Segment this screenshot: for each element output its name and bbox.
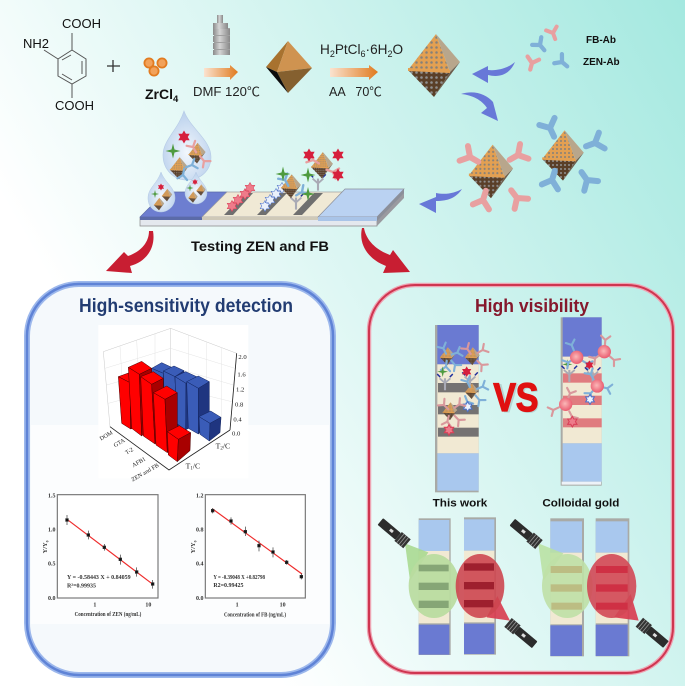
3D bar chart: 1.6 <box>237 371 246 378</box>
line chart: FB calibration: 0.8 <box>196 527 203 533</box>
capture complexes on strip <box>276 148 344 210</box>
label: AA 70C: AA 70℃ <box>329 85 382 99</box>
red bars <box>118 361 191 462</box>
3D bar chart: 0.8 <box>235 402 244 409</box>
3D bar chart: 2.0 <box>238 354 247 361</box>
3D bar chart: /C <box>193 461 200 470</box>
line chart: ZEN calibration: Y = -0.58443 X + 0.84059 <box>67 575 131 581</box>
chemical structure: aminoterephthalic acid: COOH <box>62 16 101 31</box>
comparison strips <box>435 317 620 492</box>
label: H2PtCl6 6H2O: 6 <box>361 49 366 59</box>
arrow: orange DMF step <box>204 65 238 80</box>
3D bar chart: 2 <box>220 447 223 452</box>
chemical structure: aminoterephthalic acid <box>23 16 101 113</box>
line chart: FB calibration: 0.0 <box>196 596 203 602</box>
panel: high visibility <box>369 285 673 673</box>
label: H2PtCl6 6H2O: PtCl <box>335 42 361 57</box>
line chart: ZEN calibration: 1.5 <box>48 493 55 499</box>
line chart: ZEN calibration <box>42 493 158 618</box>
3D bar chart: /C <box>223 441 230 450</box>
3D bar chart: AFB1 <box>131 457 147 469</box>
3D bar chart: 0.0 <box>232 430 241 437</box>
line chart: ZEN calibration: 1.0 <box>48 527 55 533</box>
line chart: FB calibration: R2=0.99425 <box>213 583 244 589</box>
label: ZrCl4: ZrCl <box>145 86 173 102</box>
line chart: FB calibration: Concentration of FB (ng/mL) <box>224 612 286 619</box>
3D bar chart: 0.4 <box>233 417 242 424</box>
strip: colloidal gold <box>548 317 620 486</box>
arrow: red left <box>106 231 154 273</box>
blue bars <box>152 363 221 441</box>
line chart: FB calibration: 10 <box>280 603 286 609</box>
fluorescence comparison <box>377 497 670 656</box>
3D bar chart: T <box>216 441 220 450</box>
label: this work: This work <box>433 497 488 509</box>
label: VS: VS <box>493 376 538 420</box>
arrow: red right <box>361 228 410 273</box>
test lines under light <box>419 563 628 610</box>
line chart: ZEN calibration: 1 <box>93 603 96 609</box>
label: DMF 120C: DMF 120℃ <box>193 85 260 99</box>
panel: high-sensitivity detection <box>27 284 333 675</box>
label: FB-Ab: FB-Ab <box>586 35 616 46</box>
line chart: FB calibration: 1.2 <box>196 493 203 499</box>
3D bar chart: T <box>186 461 190 470</box>
icon: brown octahedron <box>266 41 312 93</box>
label: H2PtCl6 6H2O: 2 <box>330 49 335 59</box>
3D bar chart <box>98 325 248 483</box>
3D bar chart: 1.2 <box>236 386 244 393</box>
3D bar chart: GTA <box>113 438 127 449</box>
arrow: antibodies to octahedron <box>472 62 515 83</box>
chemical structure: aminoterephthalic acid: COOH <box>55 98 94 113</box>
icon: autoclave <box>213 15 230 55</box>
plus sign <box>107 60 120 72</box>
3D bar chart: ZEN and FB <box>131 463 160 483</box>
label: H2PtCl6 6H2O: O <box>392 42 403 57</box>
label: ZrCl4: 4 <box>173 94 179 105</box>
heading: high-sensitivity detection: High-sensitivity detection <box>79 296 293 317</box>
heading: high visibility: High visibility <box>475 295 590 316</box>
blue hapten stars <box>260 182 287 212</box>
3D bar chart: T-2 <box>125 447 135 456</box>
strips <box>419 517 629 656</box>
arrow: conjugates to test strip <box>419 189 462 213</box>
line chart: FB calibration: Y = -0.39048 X +0.82798 <box>213 575 265 581</box>
arrow: orange Pt step <box>330 65 378 80</box>
label: ZEN-Ab: ZEN-Ab <box>583 57 620 68</box>
line chart: FB calibration: Y/Y₀ <box>190 540 197 553</box>
icon: ZrCl4 spheres <box>144 58 167 76</box>
antibodies: free FB-Ab and ZEN-Ab <box>524 27 571 71</box>
label: VS: VS <box>496 377 539 421</box>
glowing ellipses <box>409 554 636 618</box>
icon: Pt-coated octahedron <box>408 34 460 97</box>
conjugate: blue antibody octahedron <box>539 118 605 191</box>
droplets with sample <box>148 111 211 212</box>
line chart: ZEN calibration: R²=0.99935 <box>67 584 96 590</box>
line chart: FB calibration: 0.4 <box>196 562 203 568</box>
light cones <box>405 543 639 621</box>
3D bar chart: DOM <box>99 430 115 442</box>
label: colloidal gold: Colloidal gold <box>542 497 619 509</box>
line chart: ZEN calibration: Concentration of ZEN (ng/mL) <box>75 611 141 618</box>
label: H2PtCl6 6H2O: H <box>320 42 330 57</box>
label: H2PtCl6 6H2O: ·6H <box>366 42 387 57</box>
flashlights <box>377 517 670 649</box>
label: H2PtCl6 6H2O: 2 <box>387 49 392 59</box>
3D bar chart: 1 <box>190 467 193 472</box>
chemical structure: aminoterephthalic acid: NH2 <box>23 36 49 51</box>
conjugate: pink antibody octahedron <box>460 144 528 209</box>
label: Testing ZEN and FB: Testing ZEN and FB <box>191 239 329 254</box>
line chart: FB calibration: 1 <box>236 603 239 609</box>
line chart: ZEN calibration: 0.0 <box>48 596 55 602</box>
test strip <box>140 189 404 226</box>
line chart: ZEN calibration: Y/Y₀ <box>42 540 49 553</box>
strip: this work <box>435 325 488 492</box>
line chart: FB calibration <box>190 493 305 619</box>
line chart: ZEN calibration: 0.5 <box>48 562 55 568</box>
line chart: ZEN calibration: 10 <box>145 603 151 609</box>
arrow: octahedron to conjugates <box>461 92 498 121</box>
pink hapten stars <box>227 182 255 212</box>
